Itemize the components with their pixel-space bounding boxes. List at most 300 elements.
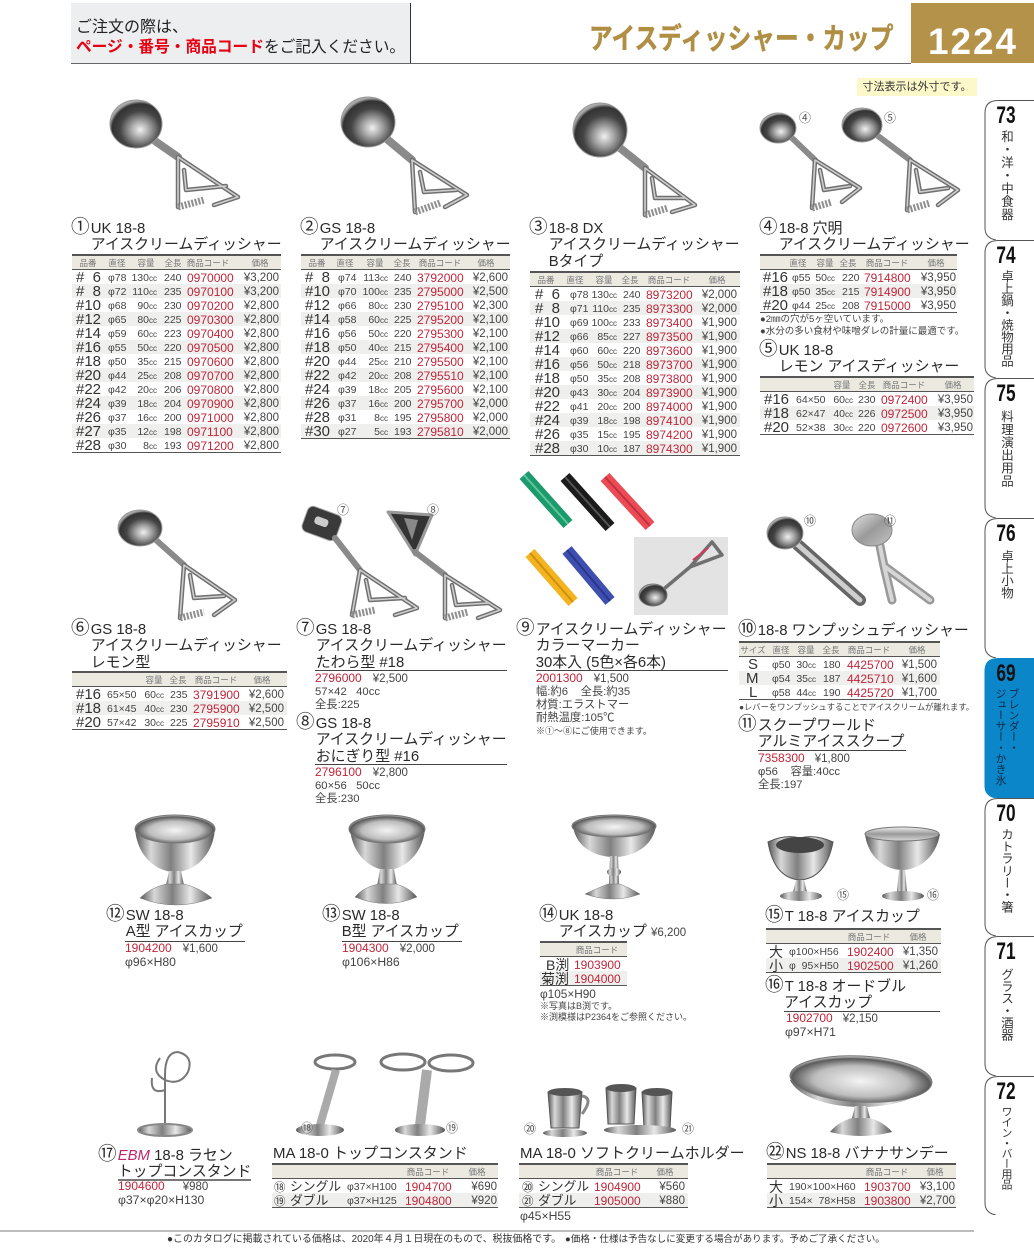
table: 商品コード <box>419 258 461 268</box>
table: 2795700 <box>417 396 464 410</box>
table: 0970800 <box>187 382 234 396</box>
table: 35cc <box>796 672 816 684</box>
table: #16 <box>764 390 789 408</box>
spec: φ96×H80 <box>125 955 176 969</box>
tab 69 active: 69 <box>996 660 1016 687</box>
table: #20 <box>76 366 101 384</box>
title: アイスクリームディッシャー <box>320 237 511 253</box>
table: 8973200 <box>646 288 693 302</box>
table: ¥3,950 <box>921 286 956 298</box>
table: 110cc <box>592 302 617 314</box>
table: #14 <box>305 310 330 328</box>
table: ¥690 <box>471 1180 497 1192</box>
spec: 60×56 50cc <box>315 780 380 792</box>
table: ¥1,900 <box>702 400 737 412</box>
table: 商品コード <box>407 1167 449 1177</box>
table: #10 <box>305 282 330 300</box>
photo: cup A <box>107 810 247 970</box>
spec: φ106×H86 <box>342 955 400 969</box>
title: レモン型 <box>91 655 150 671</box>
table: 商品コード <box>195 675 237 685</box>
tab 72: ワイン・バー用品 <box>1000 1106 1012 1189</box>
table: φ50 <box>338 342 356 354</box>
table: 240 <box>164 272 182 284</box>
table: #20 <box>535 384 560 400</box>
table: #16 <box>535 356 560 372</box>
table: ダブル <box>538 1192 576 1208</box>
code and price: 2796100 ¥2,800 <box>315 765 408 779</box>
table: ダブル <box>290 1192 328 1208</box>
panel: 10 one-push dish <box>738 514 974 712</box>
table <box>540 941 627 986</box>
table: ¥2,000 <box>702 288 737 300</box>
table: 220 <box>842 272 860 284</box>
table: 0970500 <box>187 340 234 354</box>
table: 198 <box>164 426 182 438</box>
table: 0970900 <box>187 396 234 410</box>
title: 18-8 穴明 <box>779 221 842 237</box>
table: 4425700 <box>847 658 894 672</box>
table: #18 <box>763 282 788 300</box>
panel: 9 colour marker <box>516 471 728 736</box>
table: ¥1,900 <box>702 372 737 384</box>
tab 74: 卓上鍋・焼物用品 <box>999 270 1013 367</box>
table: ¥1,900 <box>702 386 737 398</box>
table: #27 <box>76 422 101 440</box>
title <box>300 216 511 253</box>
table: 230 <box>170 702 188 714</box>
title: ⑭ <box>539 903 558 924</box>
table: ¥2,000 <box>702 302 737 314</box>
table: 8974300 <box>646 442 693 456</box>
table: #20 <box>764 418 789 436</box>
table: #18 <box>305 338 330 356</box>
spec: 全長:197 <box>758 779 803 791</box>
tab 73: 和・洋・中食器 <box>999 130 1013 221</box>
title: A型 アイスカップ <box>126 924 243 940</box>
table: 130cc <box>591 288 617 300</box>
table: 44cc <box>796 686 816 698</box>
underline <box>784 1011 940 1012</box>
tab 70 <box>984 798 1034 936</box>
photo: cups 15 and 16: ⑮ <box>837 888 849 902</box>
photo: scoops 10 and 11: ⑩ <box>804 514 816 528</box>
table: 価格 <box>927 258 945 268</box>
table: 190 <box>823 686 841 698</box>
table: B渕 <box>546 956 569 972</box>
photo: scoops 7 and 8: ⑦ <box>337 503 349 517</box>
table: 商品コード <box>848 932 890 942</box>
table: 直径 <box>789 258 807 268</box>
table: φ58 <box>338 314 356 326</box>
table: 4425720 <box>847 686 894 700</box>
table: 193 <box>394 426 412 438</box>
table: #24 <box>535 412 560 428</box>
table: 80cc <box>368 300 388 312</box>
table: 235 <box>623 302 641 314</box>
table: 全長 <box>169 675 187 685</box>
table: 全長 <box>393 258 411 268</box>
table: ¥3,200 <box>244 286 279 298</box>
table <box>72 254 281 453</box>
table: 64×50 <box>796 394 826 406</box>
photo: scoop 3 <box>572 102 698 218</box>
table: 210 <box>394 356 412 368</box>
table: #14 <box>535 342 560 358</box>
table: 100cc <box>362 286 388 298</box>
table <box>766 928 941 973</box>
table: ¥1,260 <box>903 960 938 972</box>
photo: scoops 7 and 8 <box>302 503 502 622</box>
title: ② <box>300 216 319 237</box>
table: ¥2,100 <box>473 328 508 340</box>
table: φ56 <box>338 328 356 340</box>
table: ¥2,800 <box>244 384 279 396</box>
title: アイスクリームディッシャー <box>316 732 507 748</box>
table: 1903800 <box>864 1194 911 1208</box>
table: 200 <box>623 400 641 412</box>
table: ¥2,100 <box>473 356 508 368</box>
table: ¥2,800 <box>244 356 279 368</box>
table: 50cc <box>815 272 835 284</box>
panel: 2 GS dish <box>300 96 511 440</box>
table: 価格 <box>656 1167 674 1177</box>
panel: 4 perforated dish <box>759 108 970 337</box>
table: φ78 <box>570 288 588 300</box>
table: 235 <box>394 286 412 298</box>
title: ㉒ <box>766 1141 785 1162</box>
panel: 3 18-8 DX dish <box>529 102 740 456</box>
table: 20cc <box>137 384 157 396</box>
table: 80cc <box>137 314 157 326</box>
table: 193 <box>164 440 182 452</box>
title <box>323 908 459 941</box>
table: φ39 <box>570 414 588 426</box>
table: 2795910 <box>193 716 240 730</box>
table: 198 <box>623 414 641 426</box>
table: 容量 <box>145 675 163 685</box>
table: 0970700 <box>187 368 234 382</box>
table: 品番 <box>79 258 97 268</box>
table: 2795800 <box>417 410 464 424</box>
title <box>766 979 906 1012</box>
title: ⑤ <box>759 338 778 359</box>
table: 1903700 <box>864 1180 911 1194</box>
table: ¥2,300 <box>473 300 508 312</box>
table: φ37 <box>108 412 126 424</box>
title: GS 18-8 <box>316 716 371 732</box>
table: 40cc <box>144 702 164 714</box>
table: 206 <box>164 384 182 396</box>
underline <box>125 941 245 942</box>
title <box>296 617 507 671</box>
title: UK 18-8 <box>559 908 613 924</box>
code and price: 2001300 ¥1,500 <box>536 671 629 685</box>
table: φ58 <box>772 686 790 698</box>
photo: scoop 6 <box>118 510 238 622</box>
header baseline <box>71 63 911 64</box>
table: 35cc <box>815 286 835 298</box>
table: ¥920 <box>471 1194 497 1206</box>
spec: φ37×φ20×H130 <box>118 1193 204 1207</box>
table: #10 <box>76 296 101 314</box>
table: 215 <box>164 356 182 368</box>
table: 110cc <box>132 286 157 298</box>
table: ⑲ <box>274 1196 286 1208</box>
table: 30cc <box>597 386 617 398</box>
spec: φ45×H55 <box>520 1209 571 1223</box>
table: 価格 <box>477 258 495 268</box>
table: φ100×H56 <box>789 946 839 958</box>
footer note: ●価格・仕様は予告なしに変更する場合があります。予めご了承ください。 <box>565 1234 885 1245</box>
table: ¥1,900 <box>702 442 737 454</box>
code and price: 1904600 ¥980 <box>118 1179 208 1193</box>
table: 品番 <box>537 275 555 285</box>
table: 50cc <box>597 358 617 370</box>
title <box>71 617 282 671</box>
panel: 5 UK lemon dish <box>759 338 974 436</box>
spec <box>315 686 380 711</box>
table: ¥1,600 <box>902 672 937 684</box>
table: #16 <box>76 338 101 356</box>
page number block <box>911 3 1034 63</box>
panel: 20 21 MA soft cream holder <box>519 1075 745 1225</box>
title: アイスクリームディッシャー <box>536 622 727 638</box>
table <box>72 671 287 730</box>
table: 61×45 <box>107 702 136 714</box>
spec <box>315 780 380 805</box>
underline <box>758 750 906 751</box>
tab 73: 73 <box>996 102 1016 129</box>
table: 0971000 <box>187 410 234 424</box>
table: 18cc <box>137 398 157 410</box>
table: ¥2,100 <box>473 342 508 354</box>
table: 8974000 <box>646 400 693 414</box>
table: 大 <box>769 944 783 960</box>
tab 76: 卓上小物 <box>999 550 1013 598</box>
title: NS 18-8 バナナサンデー <box>786 1146 949 1162</box>
table: #28 <box>76 436 101 454</box>
table: #24 <box>305 380 330 398</box>
notes: ●水分の多い食材や味噌ダレの計量に最適です。 <box>760 326 964 337</box>
table: ¥1,900 <box>702 316 737 328</box>
table <box>760 254 957 313</box>
table: ¥1,350 <box>903 946 938 958</box>
tab 72 <box>984 1076 1034 1215</box>
tab 71: 71 <box>996 938 1016 965</box>
table: 15cc <box>597 428 617 440</box>
table: 8974200 <box>646 428 693 442</box>
panel: 12 SW A cup <box>107 810 247 970</box>
tab 70: 70 <box>996 800 1016 827</box>
table: 230 <box>394 300 412 312</box>
title: MA 18-0 トップコンスタンド <box>273 1145 468 1162</box>
table: φ72 <box>108 286 126 298</box>
table: 235 <box>164 286 182 298</box>
table: φ69 <box>570 316 588 328</box>
table: 商品コード <box>596 1167 638 1177</box>
title: トップコンスタンド <box>118 1164 251 1180</box>
table: 225 <box>164 314 182 326</box>
table: ¥560 <box>659 1180 685 1192</box>
photo: cup B <box>323 810 463 970</box>
table: φ42 <box>338 370 356 382</box>
table: # 6 <box>535 286 560 302</box>
title: 30本入 (5色×各6本) <box>536 655 666 671</box>
table: ㉑ <box>522 1196 534 1208</box>
table: ¥2,700 <box>920 1194 955 1206</box>
title: ⑨ <box>516 617 535 638</box>
table: 30cc <box>144 716 164 728</box>
spec: 幅:約6 全長:約35 <box>536 686 630 698</box>
spec <box>758 765 840 791</box>
table: φ66 <box>338 300 356 312</box>
table: φ56 <box>570 358 588 370</box>
table: ¥2,800 <box>244 398 279 410</box>
table: φ44 <box>792 300 810 312</box>
table: φ60 <box>570 344 588 356</box>
table: 20cc <box>368 370 388 382</box>
table: 180 <box>823 658 841 670</box>
table: 18cc <box>597 414 617 426</box>
photo: cup UK <box>540 810 705 1025</box>
table: #20 <box>763 296 788 314</box>
photo: colour markers and scoop <box>520 471 728 615</box>
title: GS 18-8 <box>316 622 371 638</box>
table: 230 <box>164 300 182 312</box>
table: ⑱ <box>274 1182 286 1194</box>
panel: 11 aluminium scoop <box>738 713 906 791</box>
table: 8973400 <box>646 316 693 330</box>
table: 7914900 <box>864 284 911 298</box>
note: ●レバーをワンプッシュすることでアイスクリームが離れます。 <box>739 702 974 712</box>
table: ¥2,800 <box>244 342 279 354</box>
table: φ37 <box>338 398 356 410</box>
table: 7915000 <box>864 298 911 312</box>
table: 16cc <box>368 398 388 410</box>
table: #18 <box>76 700 101 716</box>
table: φ50 <box>108 356 126 368</box>
table: 3792000 <box>417 270 464 284</box>
title <box>99 1148 251 1181</box>
tab 75: 75 <box>996 380 1016 407</box>
title: おにぎり型 #16 <box>316 749 419 765</box>
table: #16 <box>763 268 788 286</box>
table: 200 <box>164 412 182 424</box>
table: シングル <box>538 1178 589 1194</box>
table: ¥3,950 <box>921 272 956 284</box>
photo: scoops 10 and 11 <box>766 514 934 606</box>
table: φ44 <box>338 356 356 368</box>
table: 40cc <box>833 408 853 420</box>
table: 2795000 <box>417 284 464 298</box>
title: MA 18-0 ソフトクリームホルダー <box>520 1145 745 1162</box>
title: UK 18-8 <box>91 221 145 237</box>
table <box>301 254 510 439</box>
table: 208 <box>164 370 182 382</box>
table: 215 <box>394 342 412 354</box>
tab 69 active: ブレンダー・ <box>1007 688 1019 753</box>
table: ¥2,800 <box>244 328 279 340</box>
table: 0972400 <box>881 392 928 406</box>
table <box>530 271 740 456</box>
photo: cone stands: ⑱ <box>301 1121 313 1135</box>
table: 1904000 <box>574 972 621 986</box>
panel: 18 19 MA stand <box>272 1045 500 1210</box>
table: #12 <box>76 310 101 328</box>
tab 75 <box>984 378 1034 518</box>
table: 4425710 <box>847 672 894 686</box>
table: 小 <box>769 1192 783 1208</box>
spec: 57×42 40cc <box>315 686 380 698</box>
photo: scoop 1 <box>110 100 240 210</box>
table: ¥2,000 <box>473 412 508 424</box>
table: 85cc <box>597 330 617 342</box>
title: SW 18-8 <box>342 908 400 924</box>
table: #18 <box>76 352 101 370</box>
title <box>516 617 727 671</box>
table <box>767 1163 956 1208</box>
title: ⑮ <box>765 904 784 925</box>
table: 価格 <box>926 1167 944 1177</box>
table: 2795300 <box>417 326 464 340</box>
title: たわら型 #18 <box>316 655 404 671</box>
table: 204 <box>164 398 182 410</box>
tab 75: 料理演出用品 <box>999 410 1013 487</box>
table: ¥2,800 <box>244 412 279 424</box>
table: 130cc <box>131 272 157 284</box>
underline <box>536 670 728 671</box>
table: φ55 <box>108 342 126 354</box>
table: φ78 <box>108 272 126 284</box>
title: ⑪ <box>738 713 757 734</box>
table: 大 <box>769 1178 783 1194</box>
table: 220 <box>858 422 876 434</box>
table: #10 <box>535 314 560 330</box>
table: 240 <box>623 288 641 300</box>
table: 直径 <box>772 645 790 655</box>
table: 225 <box>170 716 188 728</box>
table: #20 <box>76 714 101 730</box>
spec: ※①〜⑧にご使用できます。 <box>536 726 652 736</box>
title <box>738 713 904 750</box>
table: 113cc <box>363 272 388 284</box>
title: 18-8 DX <box>549 221 603 237</box>
table: ¥1,900 <box>702 414 737 426</box>
table: φ35 <box>108 426 126 438</box>
table: 100cc <box>591 316 617 328</box>
photo: cone holders <box>519 1075 745 1225</box>
table: ¥2,100 <box>473 370 508 382</box>
title <box>71 216 282 253</box>
table: 2795600 <box>417 382 464 396</box>
table: 60cc <box>833 394 853 406</box>
table: 8973700 <box>646 358 693 372</box>
table: 全長 <box>839 258 857 268</box>
table: #28 <box>305 408 330 426</box>
table: 65×50 <box>107 688 136 700</box>
table: 2795100 <box>417 298 464 312</box>
photo: banana dish <box>767 1050 957 1210</box>
photo: scoops 4 and 5: ④ <box>799 111 811 125</box>
table <box>760 376 974 435</box>
table: ¥2,100 <box>473 314 508 326</box>
underline <box>342 941 462 942</box>
table: #16 <box>305 324 330 342</box>
title: ① <box>71 216 90 237</box>
table: 195 <box>623 428 641 440</box>
title: ⑧ <box>296 711 315 732</box>
